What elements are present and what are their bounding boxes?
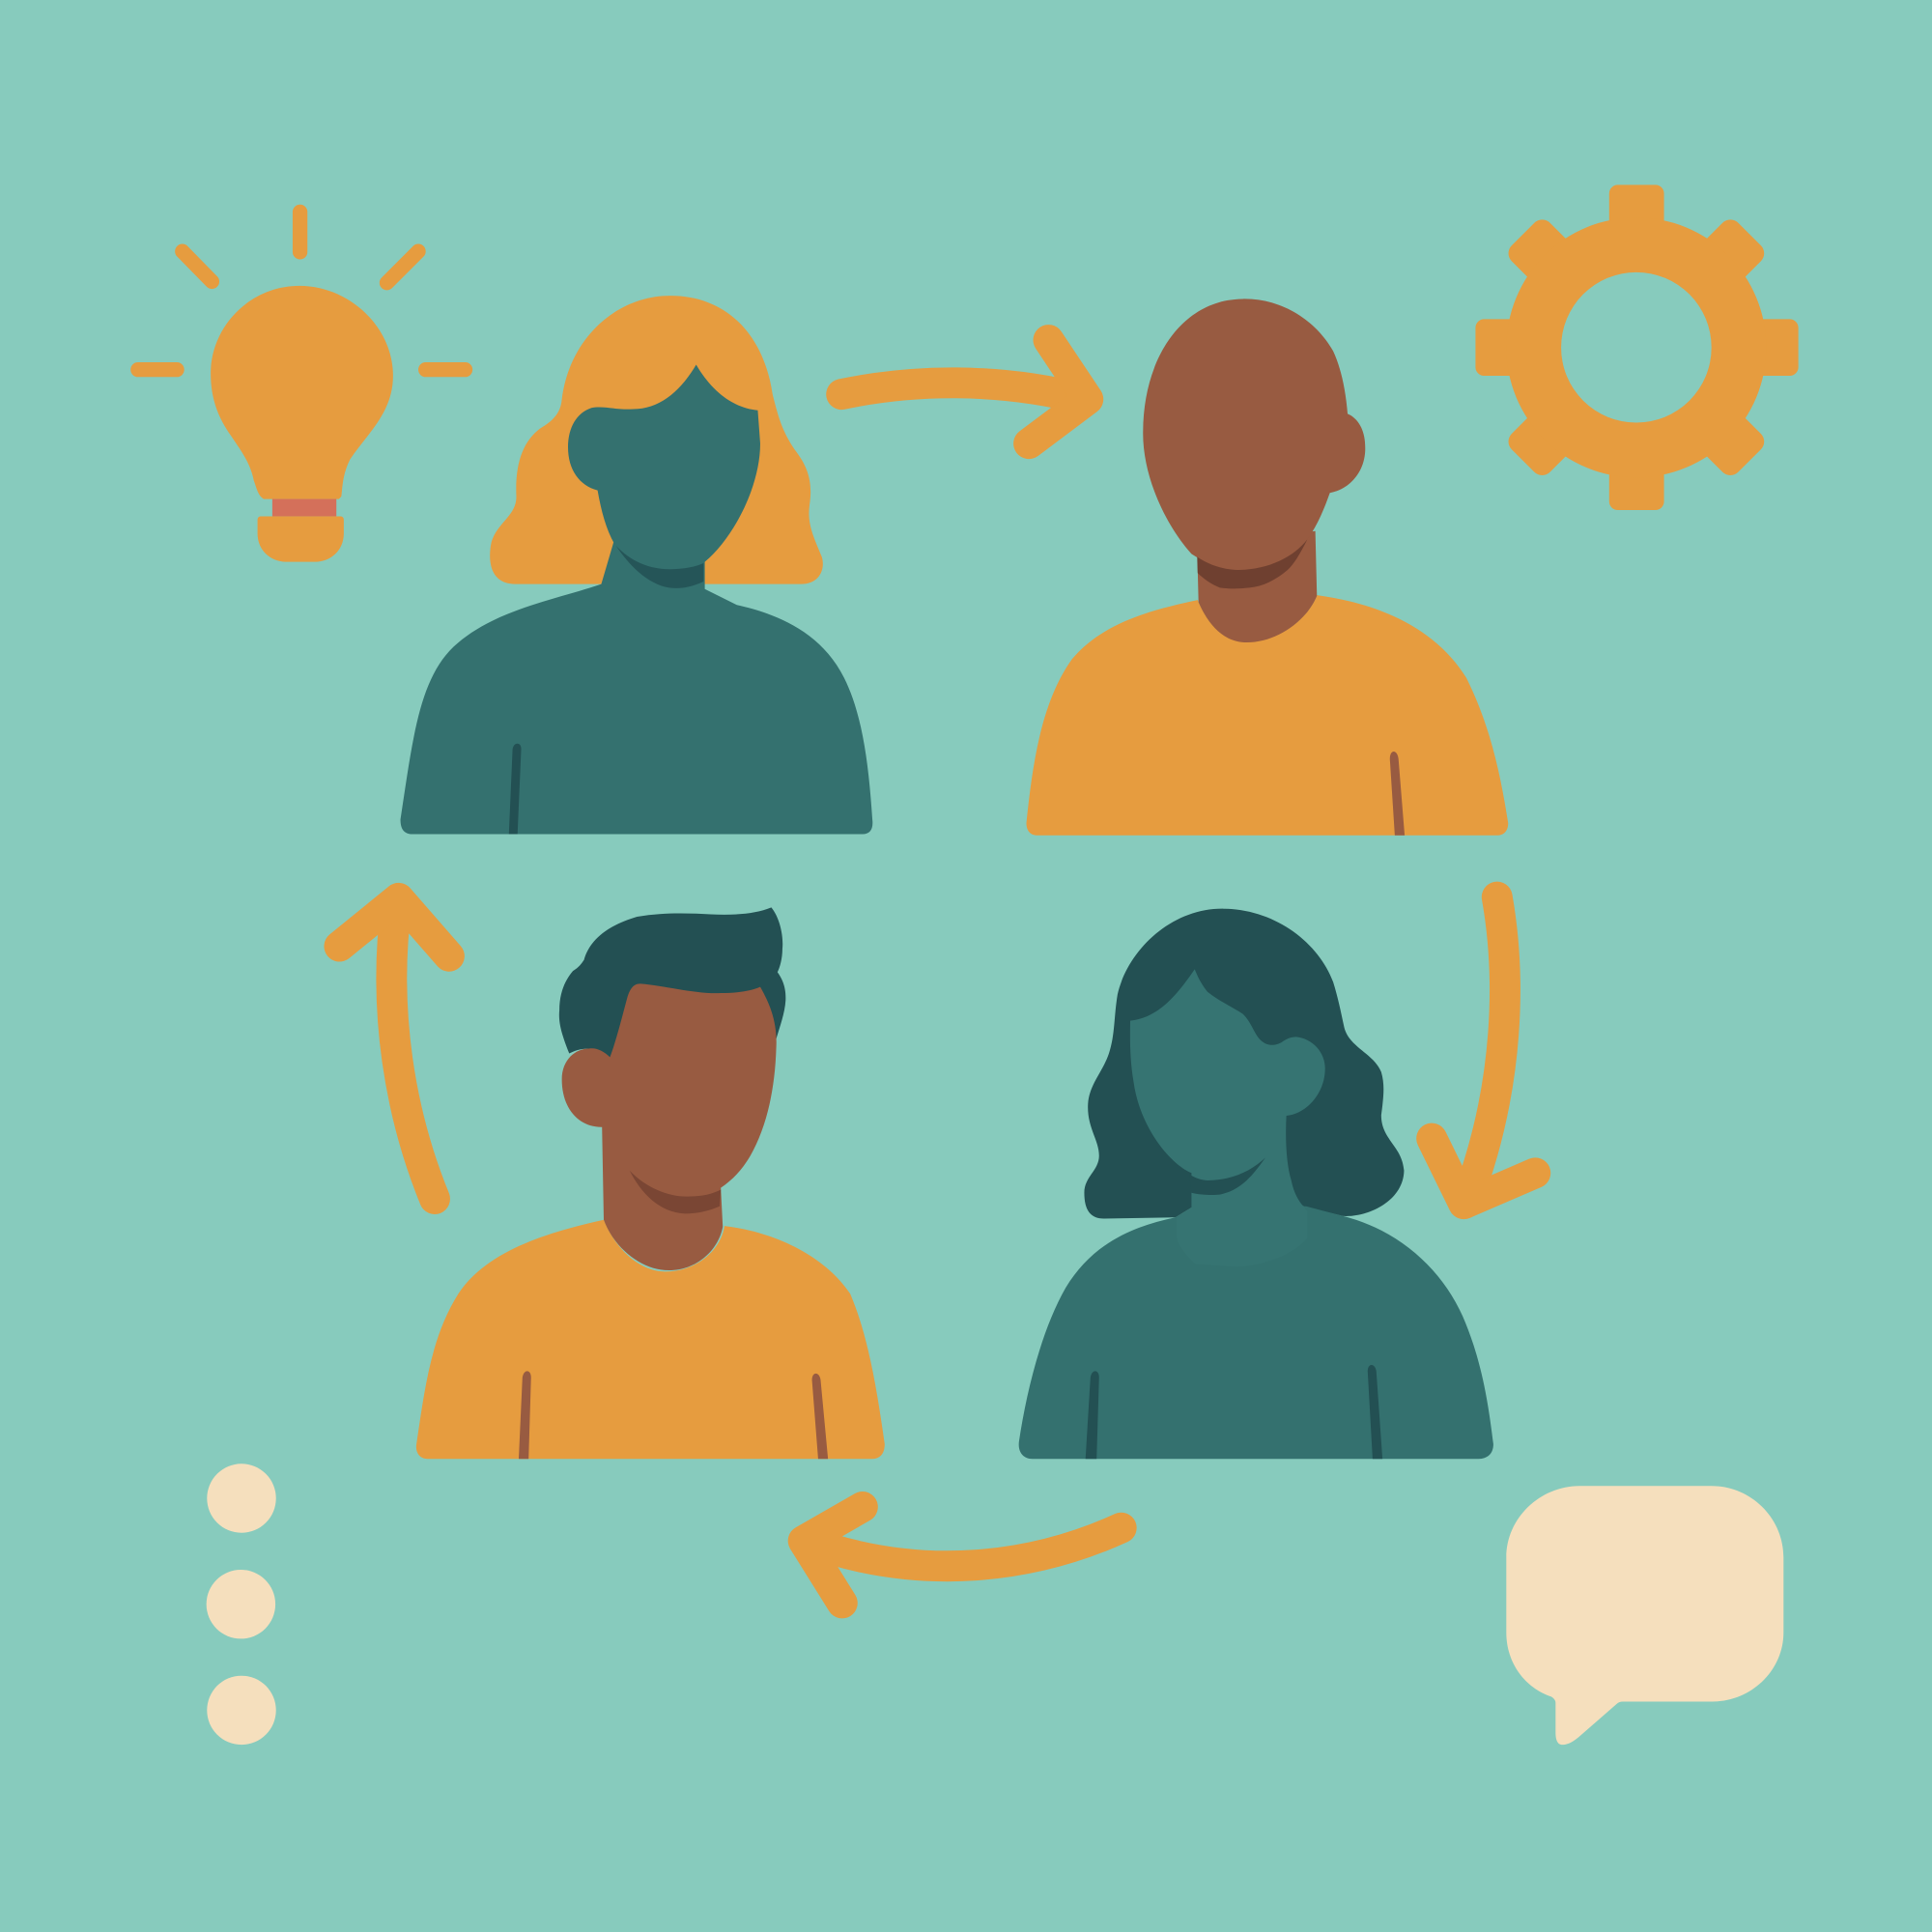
- person: top-left woman with orange hair: [401, 296, 872, 835]
- person: bottom-right woman with dark hair: [1019, 909, 1493, 1459]
- icon: speech bubble: [1506, 1486, 1783, 1745]
- icon: gear: [1475, 185, 1799, 510]
- person: bottom-left man with dark hair: [416, 907, 885, 1459]
- icon: light bulb: [138, 212, 466, 562]
- arrow: right, top to bottom: [1432, 897, 1535, 1204]
- icon: three vertical dots: [207, 1463, 276, 1745]
- person: top-right bald man: [1026, 298, 1508, 836]
- arrow: left, bottom to top: [339, 898, 449, 1199]
- arrow: bottom, right to left: [804, 1507, 1122, 1603]
- arrow: top, left to right: [841, 340, 1088, 443]
